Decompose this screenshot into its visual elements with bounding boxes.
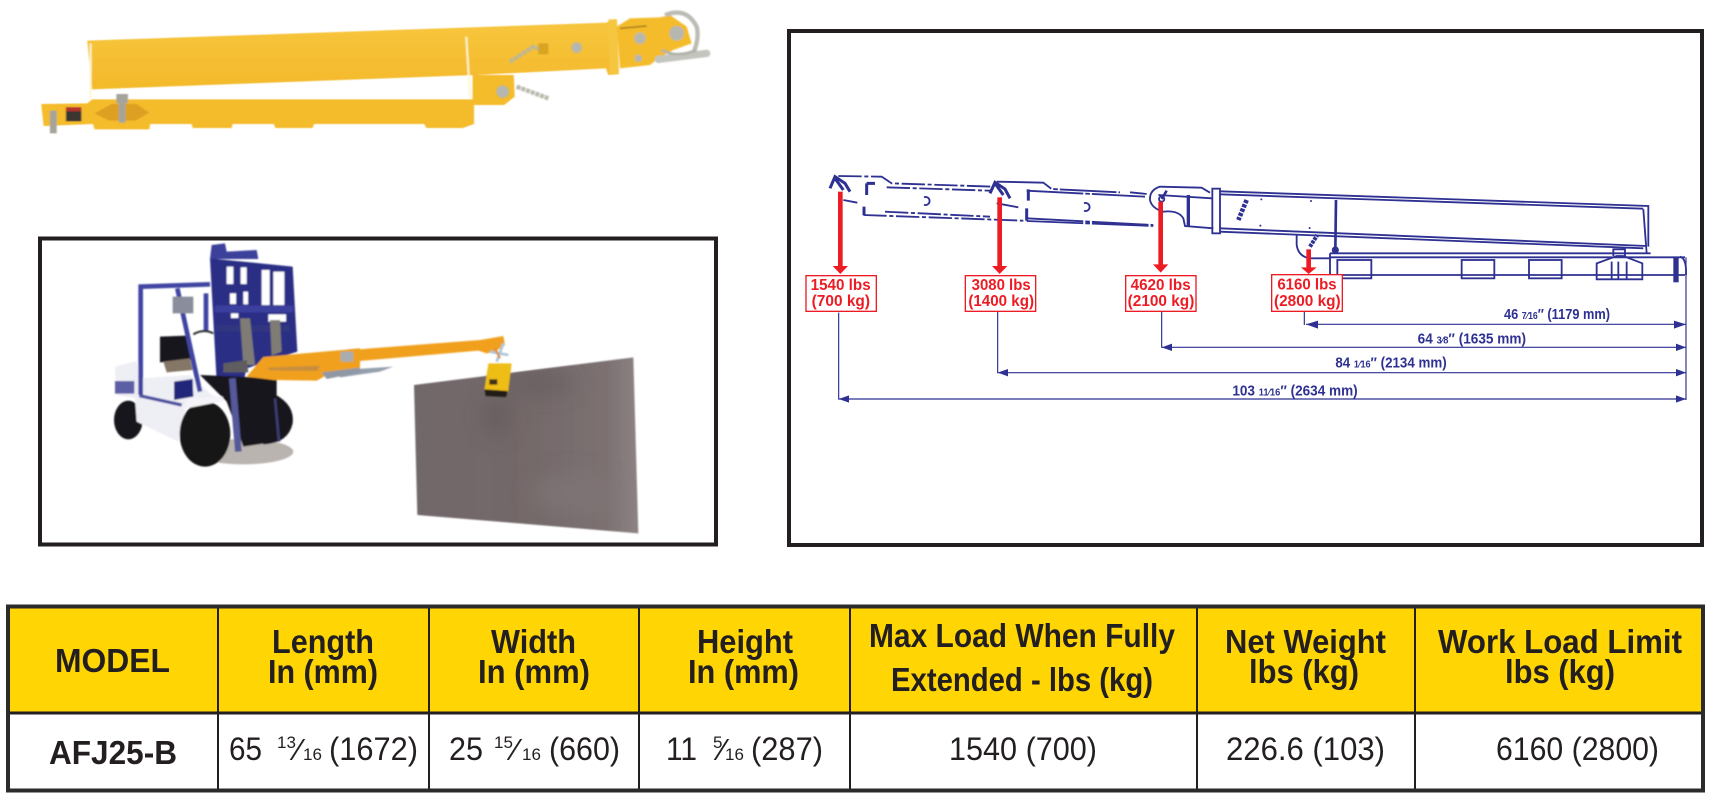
- cell: height: (287): [751, 731, 823, 767]
- dimension labels: 103 11⁄16″ (2634 mm): [1232, 384, 1358, 400]
- cell: net weight: 226.6 (103): [1226, 731, 1385, 767]
- dimension lines: [839, 257, 1686, 403]
- cell: height: ⁄: [713, 732, 730, 767]
- dimension labels: 46 7⁄16″ (1179 mm): [1504, 307, 1610, 323]
- cell: width: 16: [522, 745, 541, 764]
- label: 3080 lbs: 3080 lbs: [972, 277, 1031, 294]
- label: 6160 lbs: [1272, 275, 1342, 311]
- cell: height: 16: [725, 745, 744, 764]
- header: width: In (mm): [478, 653, 590, 690]
- cab frame: [141, 284, 210, 395]
- header: work load limit: lbs (kg): [1505, 653, 1615, 690]
- cell: height: [666, 731, 823, 767]
- fork tine: [340, 367, 393, 377]
- cell: length: [229, 731, 418, 767]
- photo: fork jib attachment: [41, 13, 707, 133]
- label: 1540 lbs: [806, 276, 876, 311]
- body: [115, 361, 223, 442]
- shackle: [665, 13, 698, 57]
- header: max load: [869, 617, 1176, 698]
- header: work load limit: Work Load Limit: [1438, 623, 1682, 660]
- red load arrows: [833, 192, 1317, 274]
- lifting clamp: [484, 363, 512, 392]
- label: 1540 lbs: 1540 lbs: [811, 277, 871, 294]
- label: 4620 lbs: (2100 kg): [1128, 293, 1194, 310]
- header: width: Width: [491, 623, 576, 660]
- load labels: [806, 275, 1342, 311]
- header: height: In (mm): [688, 653, 799, 690]
- jib arm: [247, 348, 360, 381]
- header: width: [478, 623, 590, 690]
- sleeve window: [95, 104, 149, 121]
- panel: load capacity diagram: [789, 31, 1702, 545]
- rigging: [490, 343, 508, 362]
- specification table: [7, 606, 1703, 790]
- label: 6160 lbs: 6160 lbs: [1277, 276, 1337, 293]
- cell: width: 25: [449, 731, 483, 767]
- upper boom: [87, 19, 618, 89]
- table header band: [8, 606, 1703, 713]
- tip hook: [830, 177, 850, 192]
- table grid: [218, 607, 1415, 790]
- seat: [160, 336, 192, 362]
- mast strut: [232, 378, 238, 452]
- label: 3080 lbs: (1400 kg): [968, 293, 1034, 310]
- mast windows: [227, 267, 286, 322]
- header: length: In (mm): [268, 653, 378, 690]
- mast: [210, 258, 297, 382]
- header: net weight: lbs (kg): [1249, 653, 1359, 690]
- locking pins: [53, 94, 122, 133]
- cell: width: ⁄: [506, 732, 523, 767]
- tip section: [838, 176, 1023, 221]
- dimension labels: [1232, 307, 1610, 400]
- label: 4620 lbs: 4620 lbs: [1131, 277, 1191, 294]
- tie rods: [91, 37, 470, 99]
- header: length: [268, 623, 378, 690]
- header: model: MODEL: [55, 642, 170, 679]
- header: net weight: [1225, 623, 1386, 690]
- rear tyre: [114, 401, 143, 439]
- cell: width: 15: [494, 733, 513, 752]
- lower mount: [1297, 234, 1330, 258]
- front axle dark area: [200, 375, 277, 447]
- cell: height: 11: [666, 731, 697, 767]
- cell: length: 16: [303, 745, 322, 764]
- dimension labels: 64 3⁄8″ (1635 mm): [1418, 331, 1526, 347]
- bolts: [496, 26, 684, 98]
- boom mount bracket: [473, 75, 515, 105]
- cell: length: ⁄: [289, 732, 306, 767]
- collar: [1212, 189, 1220, 233]
- jib body: [41, 19, 618, 133]
- photo: concrete slab and clamp: [340, 336, 638, 533]
- header: max load: Max Load When Fully: [869, 617, 1176, 654]
- boom head plate: [617, 15, 692, 68]
- chains: [510, 47, 547, 62]
- header: length: Length: [272, 623, 374, 660]
- main boom: [1220, 191, 1648, 253]
- label: 4620 lbs: [1126, 276, 1196, 311]
- cell: length: 65: [229, 731, 262, 767]
- cell: width: (660): [549, 731, 620, 767]
- concrete slab: [414, 357, 638, 533]
- photo: forklift: [114, 243, 360, 467]
- cell: width: [449, 731, 620, 767]
- cell: length: (1672): [329, 731, 418, 767]
- sticker: [66, 107, 81, 121]
- boom brace: [1331, 200, 1340, 250]
- boom flange: [608, 19, 619, 74]
- far front tyre: [257, 394, 293, 444]
- drawing: extended jib: [830, 176, 1686, 282]
- slab shading: [490, 367, 560, 424]
- cell: height: 5: [713, 733, 722, 752]
- pivot head: [1150, 187, 1213, 228]
- carriage and forks: [240, 318, 255, 365]
- jib head and rigging: [496, 13, 707, 98]
- lower fork sleeve: [41, 99, 474, 129]
- header: max load: Extended - lbs (kg): [891, 661, 1153, 698]
- header: height: [688, 623, 799, 690]
- near front tyre: [180, 401, 230, 467]
- label: 1540 lbs: (700 kg): [812, 293, 870, 310]
- jib end: [340, 336, 512, 397]
- dimension labels: 84 1⁄16″ (2134 mm): [1335, 356, 1447, 372]
- cell: model name: AFJ25-B: [49, 734, 177, 771]
- cell: work load limit: 6160 (2800): [1496, 731, 1659, 767]
- cell: max load: 1540 (700): [949, 731, 1097, 767]
- label: 3080 lbs: [965, 276, 1036, 311]
- header: height: Height: [697, 623, 793, 660]
- label: 6160 lbs: (2800 kg): [1274, 293, 1341, 310]
- middle section: [997, 182, 1153, 226]
- header: work load limit: [1438, 623, 1682, 690]
- cell: length: 13: [277, 733, 296, 752]
- fork sleeve: [1330, 253, 1685, 275]
- floor shadow: [193, 439, 293, 464]
- panel: forklift photo: [40, 238, 716, 544]
- header: net weight: Net Weight: [1225, 623, 1386, 660]
